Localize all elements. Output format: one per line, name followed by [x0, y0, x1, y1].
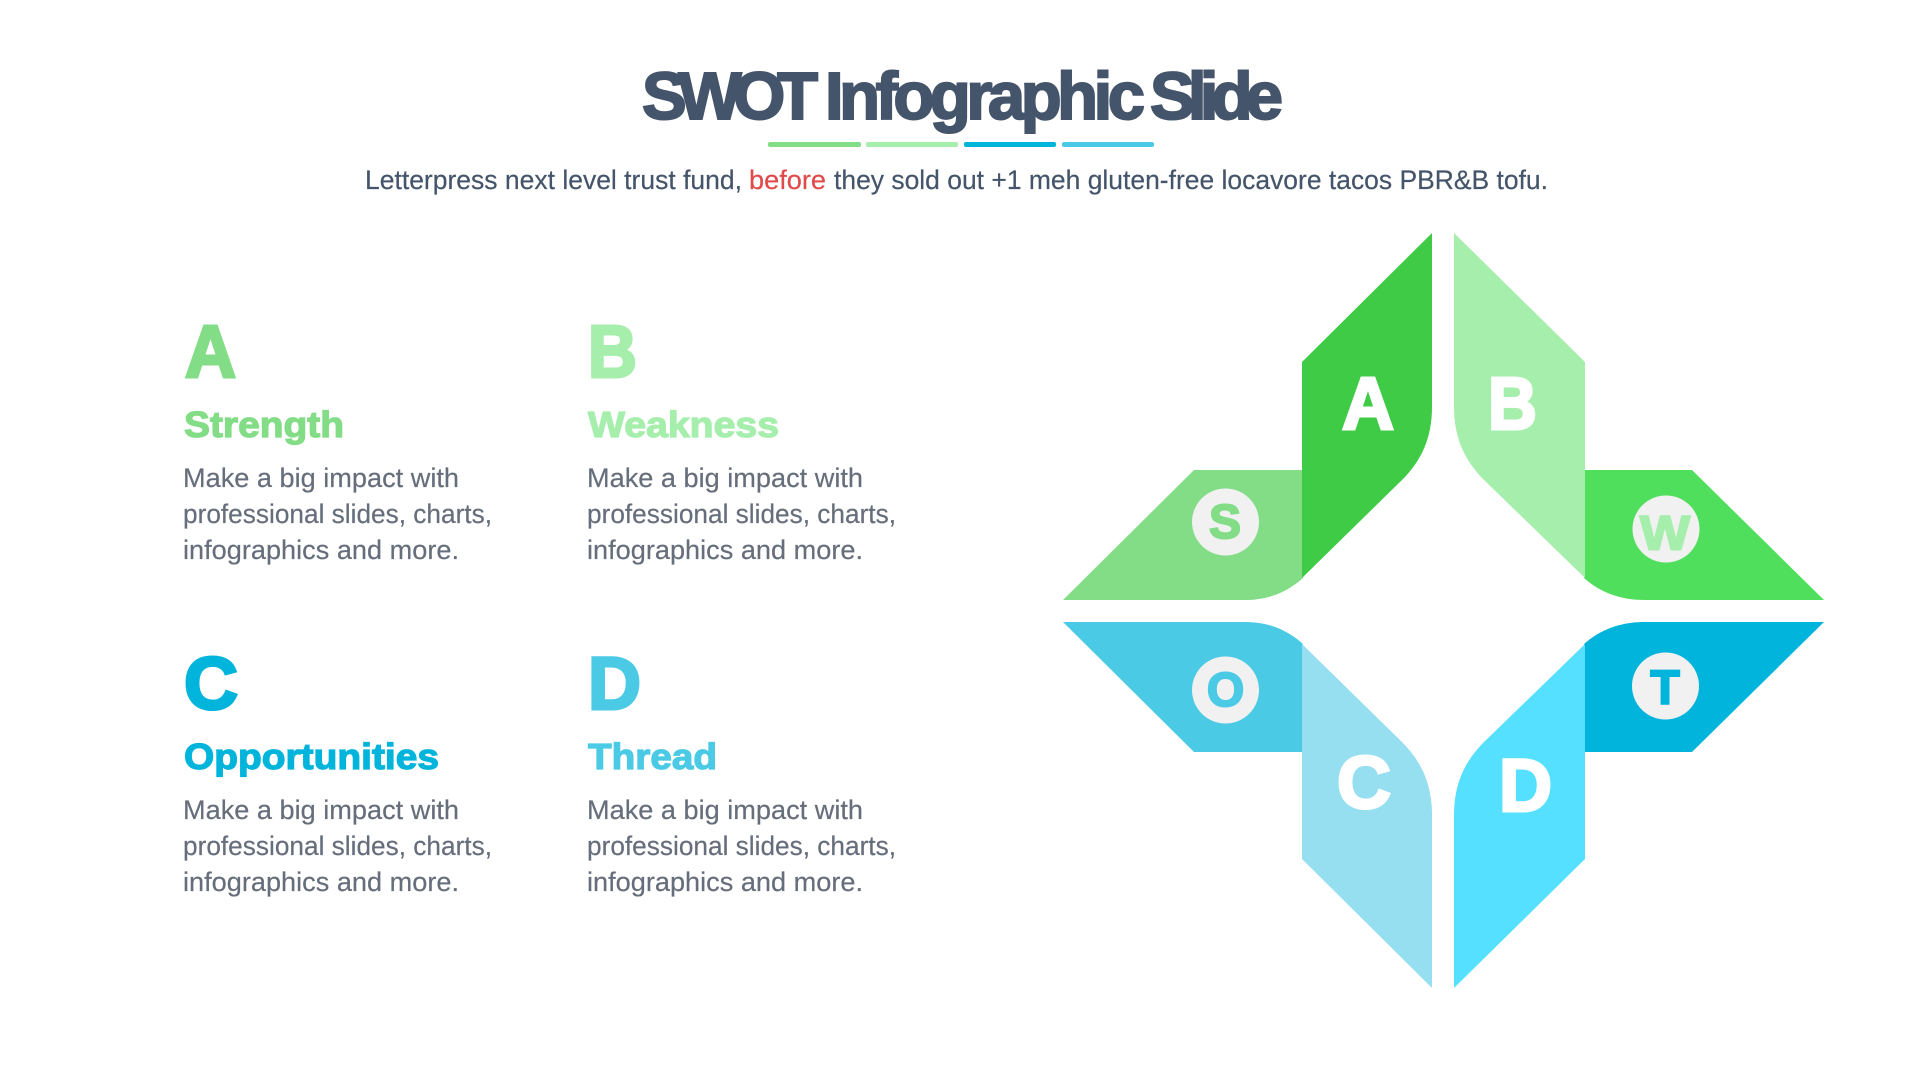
title: Infographic	[825, 59, 1145, 134]
shape: S wing	[1063, 470, 1303, 600]
shape: T wing: T	[1650, 662, 1680, 715]
shape: W wing	[1584, 470, 1824, 600]
panel: D Thread	[587, 642, 896, 897]
panel: C Opportunities	[183, 642, 492, 897]
big letter C: C	[184, 642, 238, 725]
title: SWOT	[642, 59, 818, 134]
title underline: four colour bars	[768, 142, 1154, 147]
body text	[587, 463, 896, 565]
body text: infographics and more.	[183, 867, 459, 897]
shape: T wing	[1584, 622, 1824, 752]
body text: professional slides, charts,	[587, 831, 896, 861]
body text	[587, 795, 896, 897]
body text: Make a big impact with	[587, 795, 863, 825]
body text: infographics and more.	[587, 867, 863, 897]
shape: O wing	[1063, 622, 1303, 752]
big letter B: B	[588, 310, 637, 393]
body text: Make a big impact with	[587, 463, 863, 493]
shape: C blade: C	[1337, 741, 1391, 824]
shape: O wing: O	[1207, 664, 1244, 717]
shape: A blade: A	[1342, 362, 1394, 445]
heading: Thread: Thread	[588, 736, 717, 777]
body text	[183, 795, 492, 897]
body text: professional slides, charts,	[183, 831, 492, 861]
title	[642, 59, 1283, 134]
body text: professional slides, charts,	[587, 499, 896, 529]
shape: B blade: B	[1488, 362, 1537, 445]
shape: B blade	[1454, 233, 1585, 578]
big letter D: D	[588, 642, 641, 725]
SWOT diagram	[1063, 233, 1824, 988]
subtitle: before	[749, 165, 826, 195]
body text: professional slides, charts,	[183, 499, 492, 529]
big letter A: A	[185, 310, 236, 393]
shape: W wing: W	[1640, 508, 1691, 560]
shape: C blade	[1302, 644, 1432, 988]
body text	[183, 463, 492, 565]
subtitle: Letterpress next level trust fund,	[365, 165, 742, 195]
subtitle: they sold out +1 meh gluten-free locavore tacos PBR&B tofu.	[834, 165, 1548, 195]
body text: infographics and more.	[183, 535, 459, 565]
heading: Opportunities: Opportunities	[184, 736, 439, 777]
shape: S wing: S	[1209, 496, 1241, 549]
shape: D blade: D	[1499, 744, 1552, 827]
subtitle	[365, 165, 1548, 195]
shape: A blade	[1302, 233, 1432, 578]
title: Slide	[1150, 59, 1283, 134]
body text: Make a big impact with	[183, 463, 459, 493]
panel: A Strength	[183, 310, 492, 565]
heading: Strength: Strength	[184, 404, 344, 445]
body text: Make a big impact with	[183, 795, 459, 825]
panel: B Weakness	[587, 310, 896, 565]
heading: Weakness: Weakness	[588, 404, 779, 445]
shape: D blade	[1454, 644, 1585, 988]
body text: infographics and more.	[587, 535, 863, 565]
